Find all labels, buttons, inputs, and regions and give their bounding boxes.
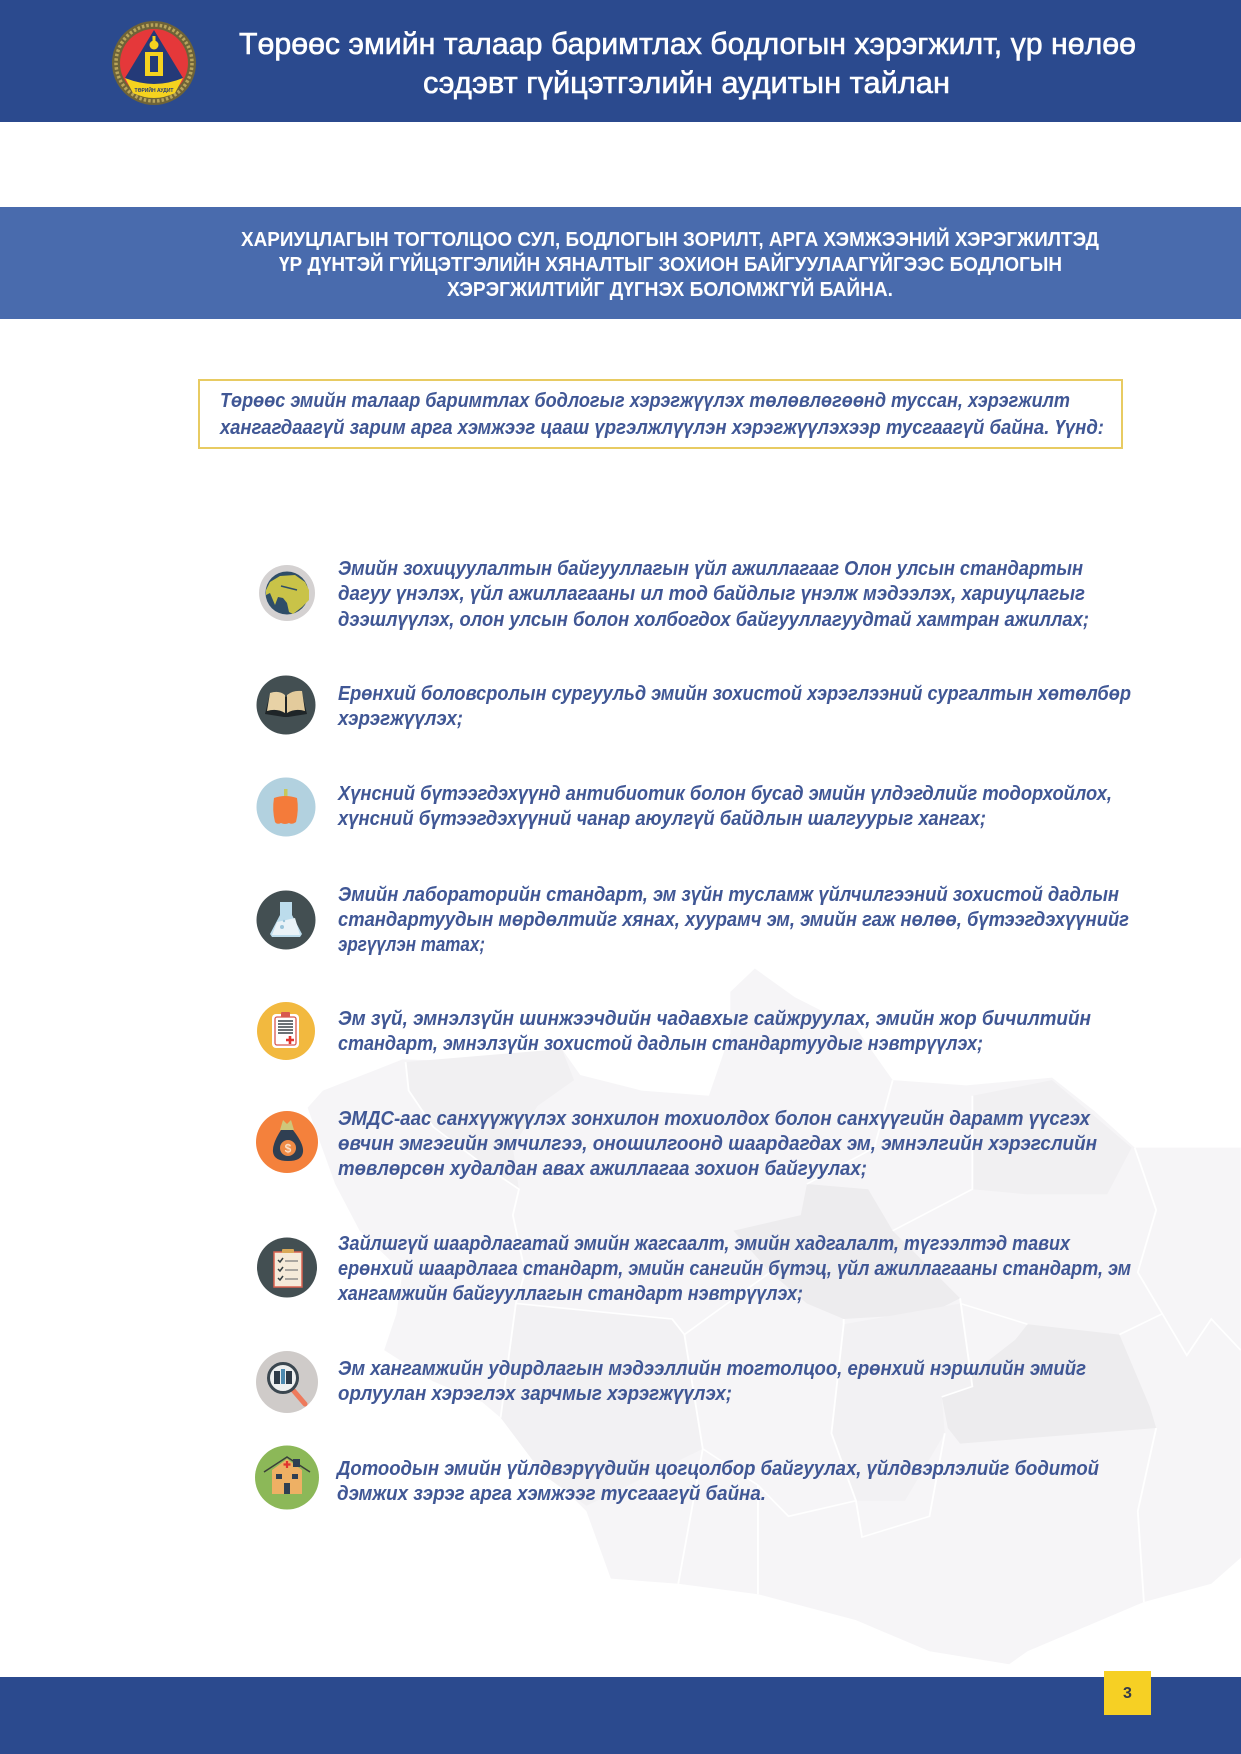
page number badge: 3 xyxy=(1123,1685,1132,1702)
intro callout box xyxy=(199,380,1122,448)
item 4: laboratory standards xyxy=(256,884,1129,956)
text: ерөнхий шаардлага стандарт, эмийн сангийн бүтэц, үйл ажиллагааны стандарт, эм xyxy=(338,1258,1131,1280)
background map of Mongolia xyxy=(308,969,1241,1664)
text: хангамжийн байгууллагын стандарт нэвтрүүлэх; xyxy=(337,1283,803,1305)
logo emblem xyxy=(112,21,196,105)
item 2: school curriculum xyxy=(256,676,1131,734)
text: Эмийн лабораторийн стандарт, эм зүйн тусламж үйлчилгээний зохистой дадлын xyxy=(338,884,1119,906)
text: Эм зүй, эмнэлзүйн шинжээчдийн чадавхыг сайжруулах, эмийн жор бичилтийн xyxy=(338,1008,1091,1030)
key finding band: ХЭРЭГЖИЛТИЙГ ДҮГНЭХ БОЛОМЖГҮЙ БАЙНА. xyxy=(447,277,893,301)
intro callout box: хангагдаагүй зарим арга хэмжээг цааш үргэлжлүүлэн хэрэгжүүлэхээр тусгаагүй байна. Үүнд: xyxy=(219,417,1104,439)
text xyxy=(337,783,1112,830)
text: төвлөрсөн худалдан авах ажиллагаа зохион байгуулах; xyxy=(338,1158,867,1180)
icon: pepper xyxy=(256,778,316,836)
key finding band xyxy=(0,207,1241,319)
text: ЭМДС-аас санхүүжүүлэх зонхилон тохиолдох болон санхүүгийн дарамт үүсгэх xyxy=(338,1108,1091,1130)
text xyxy=(338,558,1089,631)
text: дээшлүүлэх, олон улсын болон холбогдох байгууллагуудтай хамтран ажиллах; xyxy=(338,609,1089,631)
icon: globe xyxy=(259,565,315,621)
text: дэмжих зэрэг арга хэмжээг тусгаагүй байна. xyxy=(337,1483,766,1505)
text xyxy=(337,683,1131,730)
item 1: international standards xyxy=(259,558,1089,631)
item 3: food safety xyxy=(256,778,1112,836)
text: Зайлшгүй шаардлагатай эмийн жагсаалт, эмийн хадгалалт, түгээлтэд тавих xyxy=(338,1233,1071,1255)
report title: сэдэвт гүйцэтгэлийн аудитын тайлан xyxy=(423,65,950,100)
text: хэрэгжүүлэх; xyxy=(337,708,463,730)
item 9: domestic production xyxy=(255,1446,1099,1510)
icon: open book xyxy=(256,676,316,734)
text xyxy=(338,1108,1097,1180)
icon: money bag xyxy=(256,1111,318,1173)
item 7: essential medicines list xyxy=(257,1233,1131,1305)
text: эргүүлэн татах; xyxy=(338,934,485,956)
text: хүнсний бүтээгдэхүүний чанар аюулгүй байдлын шалгуурыг хангах; xyxy=(337,808,986,830)
key finding band: ҮР ДҮНТЭЙ ГҮЙЦЭТГЭЛИЙН ХЯНАЛТЫГ ЗОХИОН БАЙГУУЛААГҮЙГЭЭС БОДЛОГЫН xyxy=(279,252,1062,276)
text: дагуу үнэлэх, үйл ажиллагааны ил тод байдлыг үнэлж мэдээлэх, хариуцлагыг xyxy=(338,583,1085,605)
text: Хүнсний бүтээгдэхүүнд антибиотик болон бусад эмийн үлдэгдлийг тодорхойлох, xyxy=(337,783,1112,805)
text xyxy=(338,884,1129,956)
text xyxy=(338,1008,1091,1055)
icon: money bag: $ xyxy=(285,1142,292,1156)
header bar xyxy=(0,0,1241,122)
text: Дотоодын эмийн үйлдвэрүүдийн цогцолбор байгуулах, үйлдвэрлэлийг бодитой xyxy=(335,1458,1099,1480)
item 8: information system xyxy=(256,1351,1086,1413)
item 6: centralized procurement xyxy=(256,1108,1097,1180)
footer bar xyxy=(0,1677,1241,1754)
intro callout box: Төрөөс эмийн талаар баримтлах бодлогыг хэрэгжүүлэх төлөвлөгөөнд туссан, хэрэгжилт xyxy=(220,390,1070,412)
item 5: prescribing standards xyxy=(257,1002,1091,1060)
text: Эмийн зохицуулалтын байгууллагын үйл ажиллагааг Олон улсын стандартын xyxy=(338,558,1083,580)
logo emblem: ТӨРИЙН АУДИТ xyxy=(135,86,173,94)
text xyxy=(337,1233,1131,1305)
text: стандарт, эмнэлзүйн зохистой дадлын стандартуудыг нэвтрүүлэх; xyxy=(338,1033,983,1055)
icon: house xyxy=(255,1446,319,1510)
text xyxy=(335,1458,1099,1505)
icon: magnifier xyxy=(256,1351,318,1413)
text: өвчин эмгэгийн эмчилгээ, оношилгоонд шаардагдах эм, эмнэлгийн хэрэгслийн xyxy=(338,1133,1097,1155)
text: стандартуудын мөрдөлтийг хянах, хуурамч эм, эмийн гаж нөлөө, бүтээгдэхүүнийг xyxy=(338,909,1129,931)
report title xyxy=(239,26,1136,100)
text: Ерөнхий боловсролын сургуульд эмийн зохистой хэрэглээний сургалтын хөтөлбөр xyxy=(338,683,1131,705)
report title: Төрөөс эмийн талаар баримтлах бодлогын хэрэгжилт, үр нөлөө xyxy=(239,26,1136,61)
key finding band: ХАРИУЦЛАГЫН ТОГТОЛЦОО СУЛ, БОДЛОГЫН ЗОРИЛТ, АРГА ХЭМЖЭЭНИЙ ХЭРЭГЖИЛТЭД xyxy=(241,227,1099,251)
icon: prescription document xyxy=(257,1002,315,1060)
text: орлуулан хэрэглэх зарчмыг хэрэгжүүлэх; xyxy=(338,1383,732,1405)
icon: checklist clipboard xyxy=(257,1238,317,1298)
text xyxy=(338,1358,1086,1405)
text: Эм хангамжийн удирдлагын мэдээллийн тогтолцоо, ерөнхий нэршлийн эмийг xyxy=(338,1358,1086,1380)
icon: flask xyxy=(256,890,316,950)
page number badge xyxy=(1104,1671,1151,1715)
